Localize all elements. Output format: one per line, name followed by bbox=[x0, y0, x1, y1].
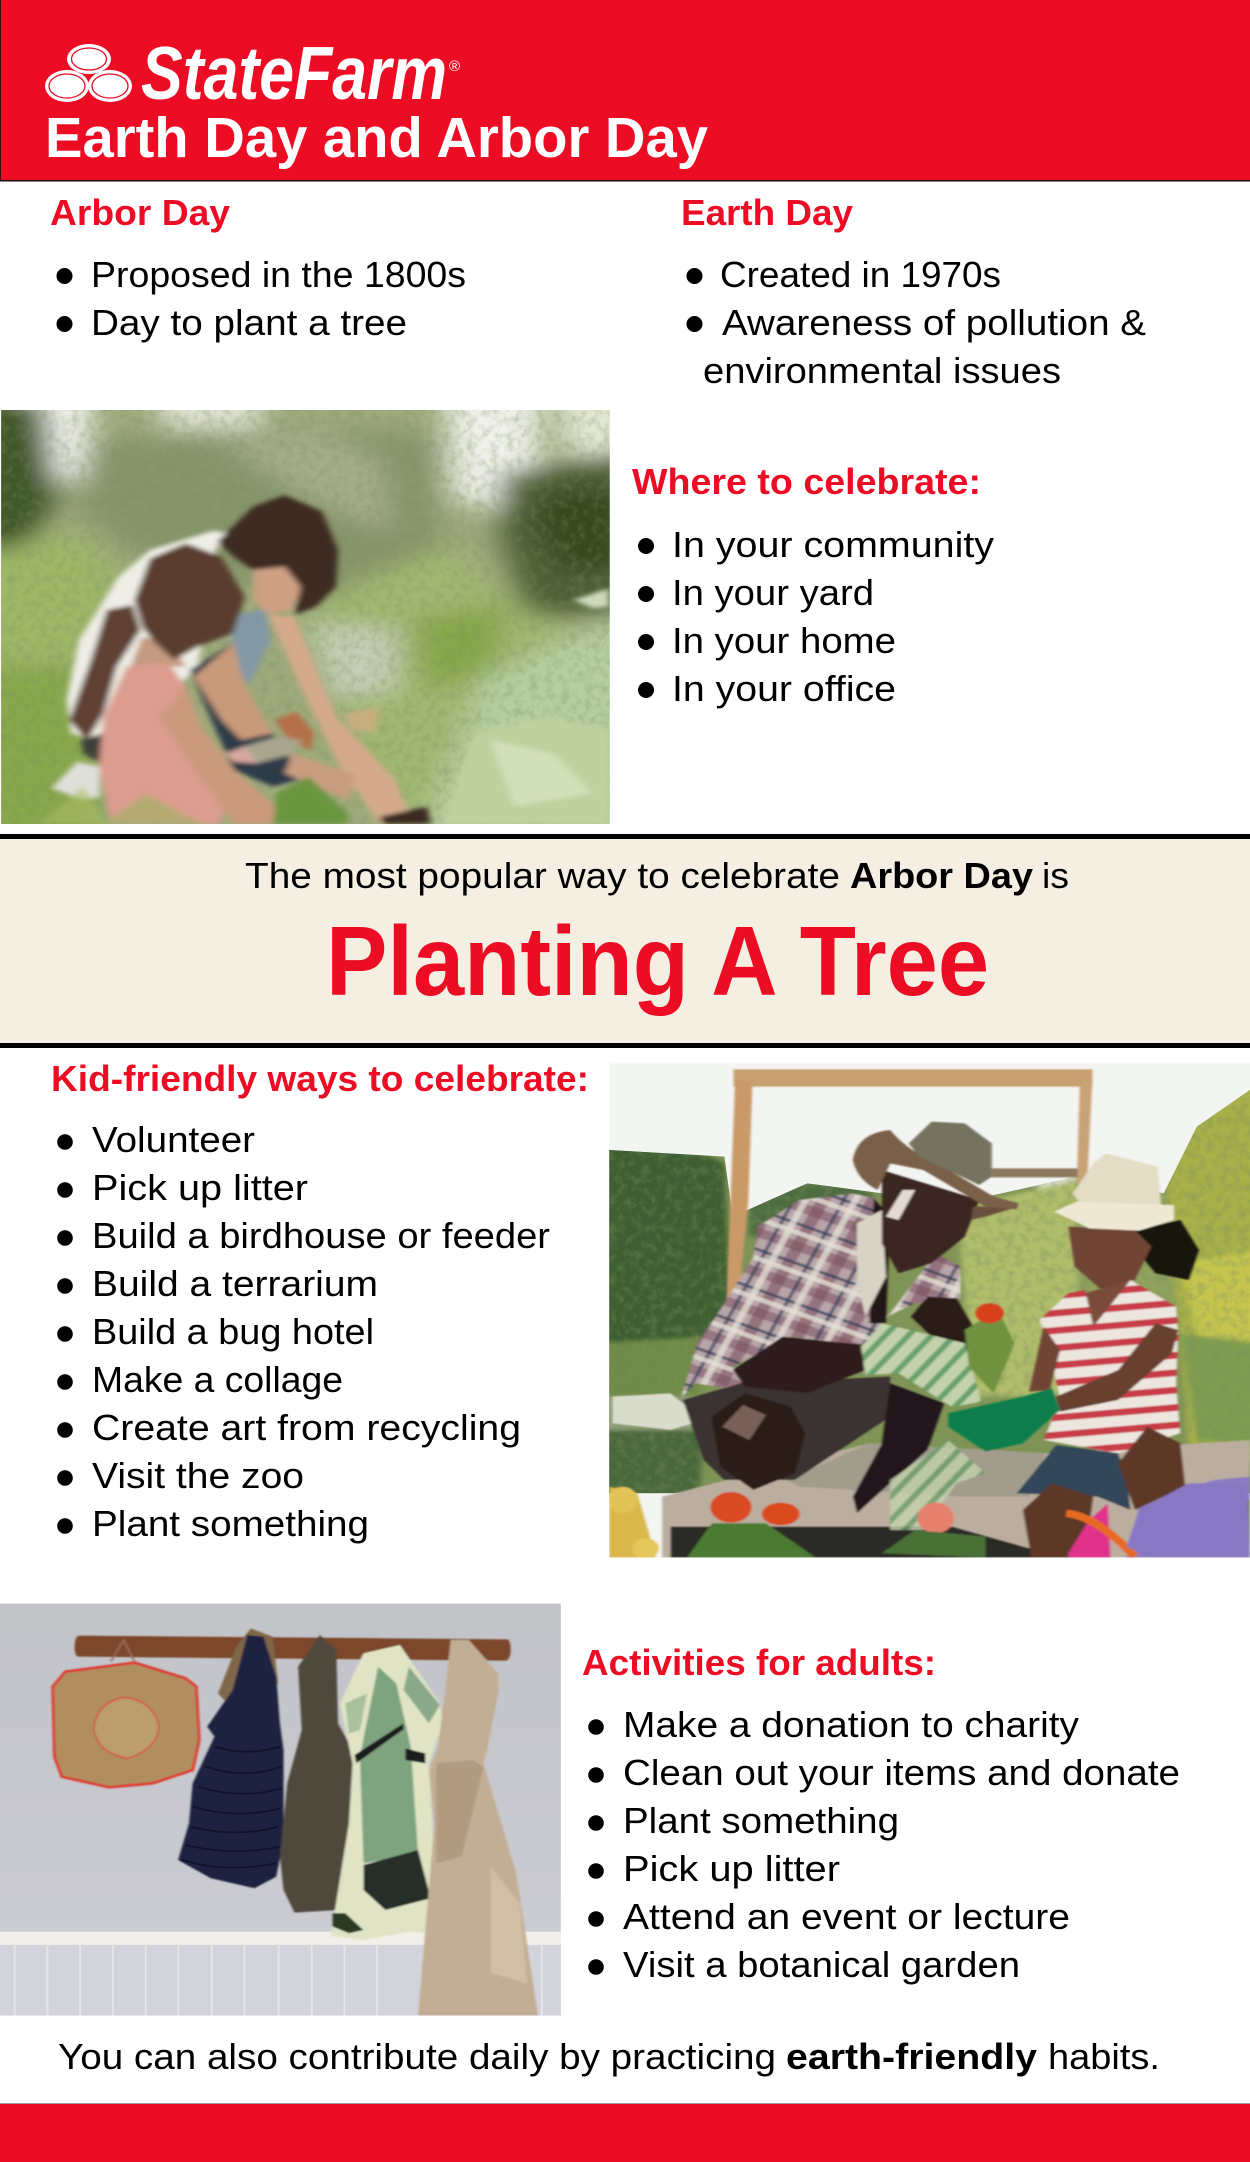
list: places bbox=[638, 524, 994, 709]
list: places: In your community bbox=[672, 524, 994, 565]
list: Earth Day facts: environmental issues bbox=[703, 350, 1061, 391]
title: Earth Day and Arbor Day bbox=[45, 106, 708, 170]
callout sentence: is bbox=[1042, 855, 1069, 896]
list: kid activities: Volunteer bbox=[92, 1119, 255, 1160]
list: Arbor Day facts bbox=[56, 254, 466, 343]
list: places: In your office bbox=[672, 668, 896, 709]
heading: where to celebrate: Where to celebrate: bbox=[632, 461, 981, 502]
list: kid activities: Make a collage bbox=[92, 1359, 343, 1400]
panel: activities for adults bbox=[582, 1642, 1180, 1985]
list: Arbor Day facts: Proposed in the 1800s bbox=[91, 254, 466, 295]
list: kid activities bbox=[57, 1119, 550, 1544]
list: adult activities: Visit a botanical garden bbox=[623, 1944, 1020, 1985]
closing sentence: You can also contribute daily by practicing bbox=[58, 2036, 776, 2077]
list: adult activities: Make a donation to charity bbox=[623, 1704, 1079, 1745]
panel: Arbor Day bbox=[50, 192, 466, 343]
callout headline: Planting A Tree bbox=[326, 906, 989, 1016]
heading: kid-friendly: Kid-friendly ways to celebrate: bbox=[51, 1058, 589, 1099]
list: kid activities: Visit the zoo bbox=[92, 1455, 304, 1496]
list: kid activities: Plant something bbox=[92, 1503, 369, 1544]
list: kid activities: Build a bug hotel bbox=[92, 1311, 374, 1352]
closing sentence: habits. bbox=[1048, 2036, 1160, 2077]
list: Earth Day facts: Awareness of pollution & bbox=[722, 302, 1146, 343]
list: Earth Day facts: Created in 1970s bbox=[720, 254, 1001, 295]
callout sentence: The most popular way to celebrate bbox=[245, 855, 840, 896]
footer bar bbox=[0, 2103, 1250, 2162]
list: Arbor Day facts: Day to plant a tree bbox=[91, 302, 407, 343]
photo: mother and daughter gardening bbox=[1, 410, 610, 824]
list: adult activities: Attend an event or lecture bbox=[623, 1896, 1070, 1937]
puffer jacket quilting bbox=[182, 1747, 282, 1868]
panel: Earth Day bbox=[681, 192, 1146, 391]
list: kid activities: Build a birdhouse or feeder bbox=[92, 1215, 550, 1256]
callout sentence: Arbor Day bbox=[850, 855, 1033, 896]
list: Earth Day facts bbox=[686, 254, 1146, 391]
callout band: planting a tree bbox=[0, 834, 1250, 1048]
list: places: In your yard bbox=[672, 572, 874, 613]
heading: Earth Day: Earth Day bbox=[681, 192, 853, 233]
photo: father and daughter planting flowers bbox=[600, 1063, 1250, 1558]
list: adult activities bbox=[588, 1704, 1180, 1985]
logo wordmark: ® bbox=[449, 58, 460, 75]
header banner bbox=[0, 0, 1250, 182]
heading: activities for adults: Activities for adults: bbox=[582, 1642, 936, 1683]
list: adult activities: Plant something bbox=[623, 1800, 899, 1841]
photo: coats and hat on a wall rack bbox=[0, 1603, 561, 2016]
callout sentence bbox=[245, 855, 1069, 896]
list: places: In your home bbox=[672, 620, 896, 661]
list: kid activities: Pick up litter bbox=[92, 1167, 308, 1208]
list: kid activities: Create art from recycling bbox=[92, 1407, 521, 1448]
panel: where to celebrate bbox=[632, 461, 994, 709]
icon: State Farm three rings bbox=[45, 44, 132, 102]
panel: kid-friendly ways bbox=[51, 1058, 589, 1544]
logo wordmark: StateFarm bbox=[141, 31, 447, 115]
closing sentence bbox=[58, 2036, 1160, 2077]
list: adult activities: Pick up litter bbox=[623, 1848, 840, 1889]
list: adult activities: Clean out your items and donate bbox=[623, 1752, 1180, 1793]
list: kid activities: Build a terrarium bbox=[92, 1263, 378, 1304]
closing sentence: earth-friendly bbox=[786, 2036, 1037, 2077]
heading: Arbor Day: Arbor Day bbox=[50, 192, 230, 233]
